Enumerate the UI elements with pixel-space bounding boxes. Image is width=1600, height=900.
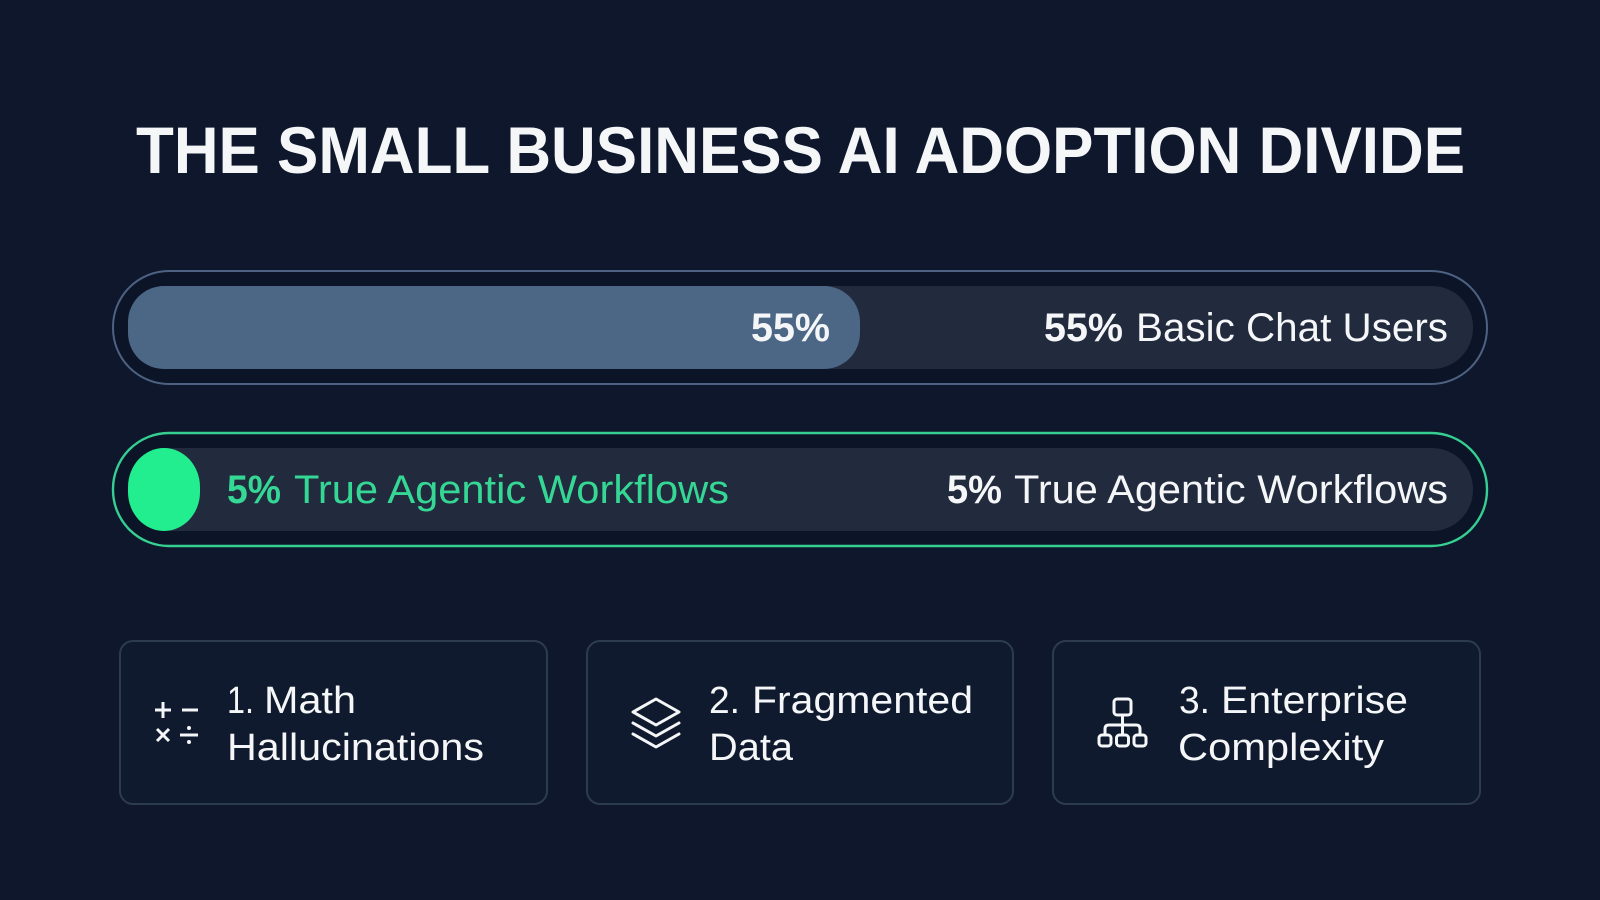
card text — [1178, 680, 1408, 769]
bar label: True Agentic Workflows — [1014, 468, 1448, 512]
card text: 1. — [227, 680, 254, 722]
panel: basic chat users bar — [113, 271, 1487, 384]
bar outline — [113, 271, 1487, 384]
green label: 5% — [227, 468, 281, 512]
bar track — [128, 286, 1473, 369]
green label: True Agentic Workflows — [294, 468, 729, 512]
bar label: 5% — [947, 468, 1002, 512]
icon: org chart — [1099, 699, 1146, 746]
card outline — [1053, 641, 1480, 804]
card text: Data — [709, 727, 794, 769]
fill value label: 55% — [751, 306, 830, 350]
bar fill 55% — [128, 286, 860, 369]
card text — [227, 680, 484, 769]
panel: fragmented data — [587, 641, 1013, 804]
card text: Fragmented — [752, 680, 973, 722]
card text — [709, 680, 973, 769]
panel: true agentic workflows bar — [113, 433, 1487, 546]
title: THE SMALL BUSINESS AI ADOPTION DIVIDE — [136, 113, 1465, 187]
icon: stacked layers — [633, 699, 679, 747]
card text: Enterprise — [1221, 680, 1408, 722]
bar fill 5% — [128, 448, 200, 531]
bar label: Basic Chat Users — [1136, 306, 1448, 350]
card text: Complexity — [1178, 727, 1384, 769]
bar label: 55% — [1044, 306, 1123, 350]
panel: math hallucinations — [120, 641, 547, 804]
card outline — [120, 641, 547, 804]
card text: Hallucinations — [227, 727, 484, 769]
panel: enterprise complexity — [1053, 641, 1480, 804]
card text: Math — [264, 680, 356, 722]
icon: math operators — [155, 702, 198, 744]
bar track — [128, 448, 1473, 531]
card text: 3. — [1179, 680, 1210, 722]
card text: 2. — [709, 680, 740, 722]
bar outline — [113, 433, 1487, 546]
card outline — [587, 641, 1013, 804]
